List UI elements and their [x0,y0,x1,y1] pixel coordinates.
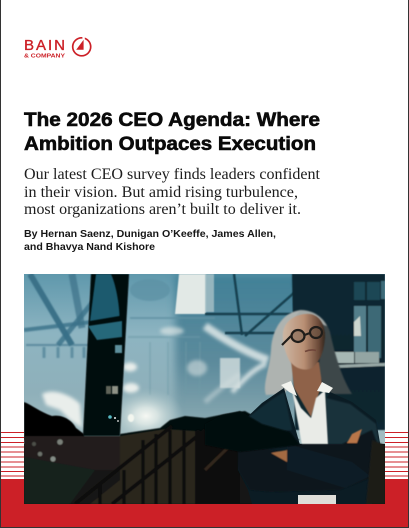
neck [291,360,322,417]
reflected light streak [205,326,268,402]
shirt [292,390,328,445]
byline: and Bhavya Nand Kishore [24,242,155,253]
distant hill right of column [120,411,300,445]
logo: Bain & Company [24,36,91,60]
icon: logo circle with arrow [73,36,91,56]
lower terrace and railing [24,426,264,504]
subtitle: most organizations aren’t built to deliver it. [24,201,301,218]
foreground foliage reflection [205,411,300,452]
byline [24,229,276,253]
logo: Bain & Company: BAIN [24,37,65,54]
subtitle: in their vision. But amid rising turbulence, [24,184,298,201]
logo: Bain & Company: & COMPANY [24,54,65,60]
red band [1,479,408,527]
hair [265,310,352,395]
photo: executive woman reflected in glass [24,274,385,504]
white tower block [175,274,206,314]
crossed arms [238,429,383,492]
subtitle: Our latest CEO survey finds leaders confident [24,166,321,183]
photo backdrop and sky [24,274,385,504]
horizon sun glow [121,392,179,432]
glasses [282,327,322,345]
title: Ambition Outpaces Execution [24,133,316,155]
tree line left [24,402,84,440]
reflected girders and clouds, left and centre [24,274,215,395]
dark building [292,274,385,430]
reflected window [220,358,240,388]
mouth [305,350,316,352]
subtitle [24,166,321,218]
dark central column [83,274,129,436]
decorative red stripes [1,432,408,476]
window frames over sky [205,274,295,336]
title [24,109,320,155]
title: The 2026 CEO Agenda: Where [24,109,320,131]
foreground right-side shadow [366,440,385,504]
woman [238,310,383,504]
clouds [42,327,207,428]
jacket [238,388,383,504]
byline: By Hernan Saenz, Dunigan O’Keeffe, James Allen, [24,229,276,240]
face [283,314,325,370]
